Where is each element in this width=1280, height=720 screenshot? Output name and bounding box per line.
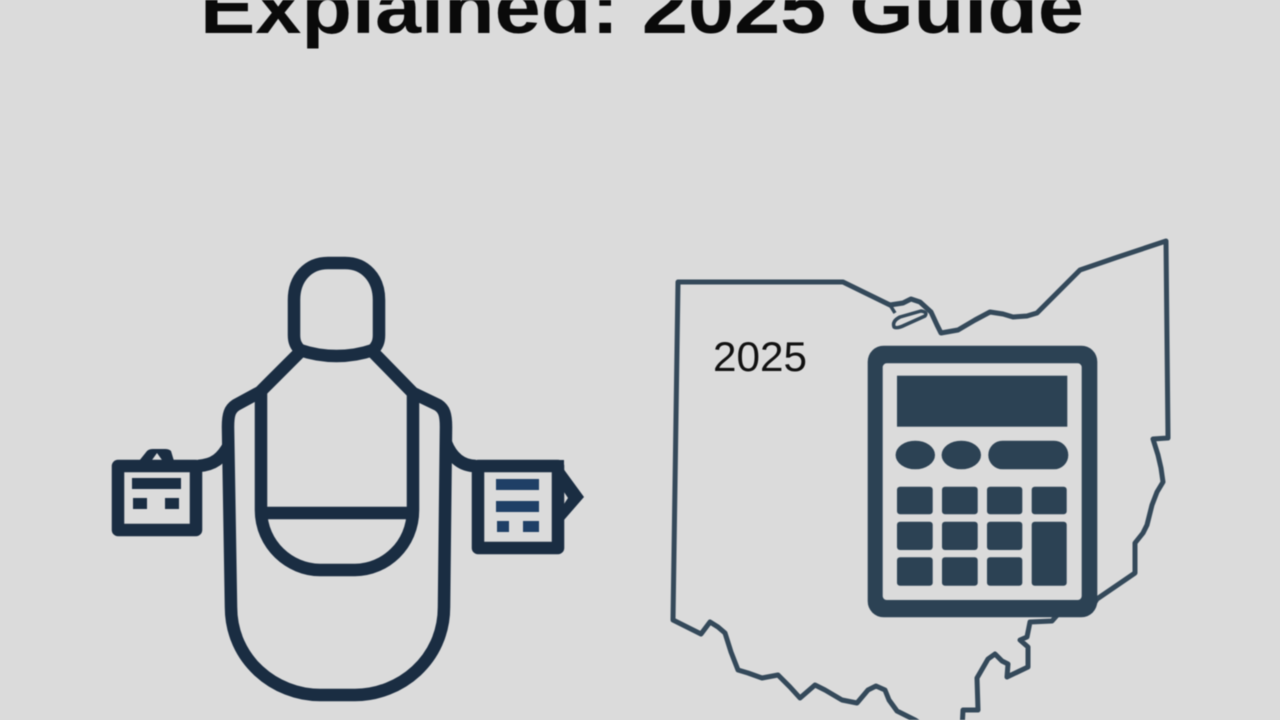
calculator body [868, 346, 1097, 617]
right tag [478, 460, 584, 548]
apron neck loop [294, 263, 379, 356]
icon: calculator [868, 346, 1097, 617]
icon: lake island [890, 305, 926, 328]
year label: 2025 [713, 333, 807, 380]
apron body [228, 349, 446, 695]
calculator keys [896, 441, 1068, 586]
apron bib pocket [261, 390, 413, 570]
right strap [446, 443, 476, 466]
left strap [198, 445, 229, 466]
map: Ohio outline [673, 241, 1168, 720]
left tag [118, 449, 196, 530]
calculator screen [897, 376, 1067, 427]
icon: apron with pockets and tags [118, 263, 584, 695]
